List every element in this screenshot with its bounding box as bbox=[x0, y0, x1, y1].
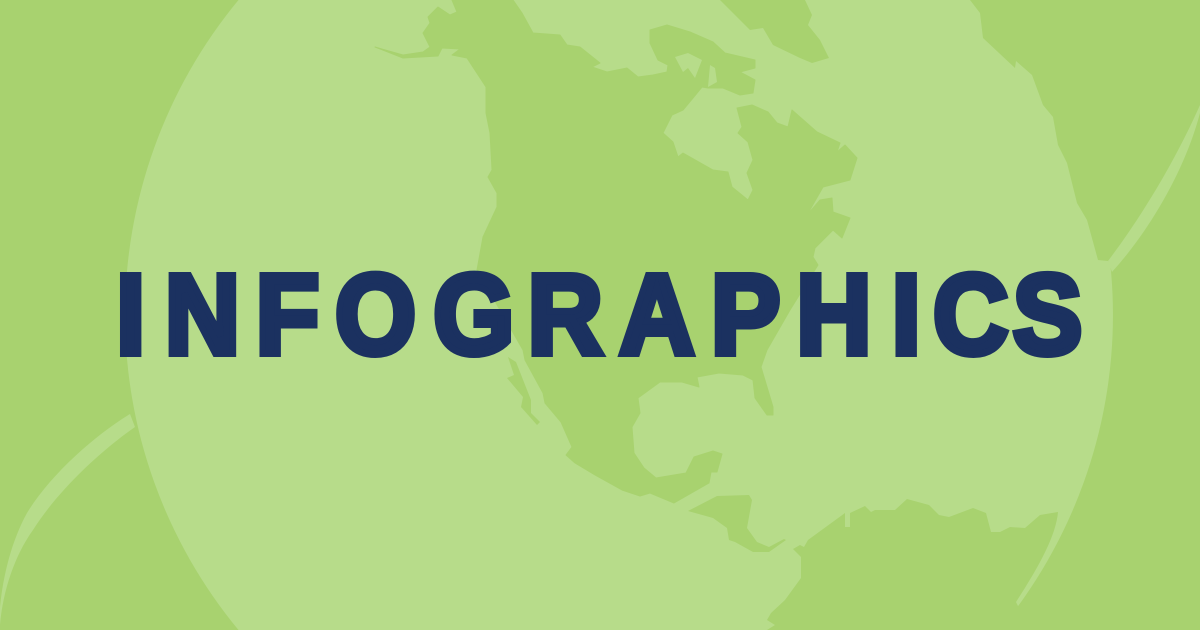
South America bbox=[767, 499, 1058, 630]
Baja California bbox=[507, 357, 540, 425]
North America bbox=[375, 0, 857, 503]
upper arctic island bbox=[720, 0, 829, 63]
Arctic channel bbox=[675, 53, 717, 87]
left orbit swoosh bbox=[0, 414, 135, 625]
top right dark land wedge bbox=[970, 0, 1200, 300]
title: INFOGRAPHICS bbox=[116, 253, 1082, 378]
right orbit swoosh bbox=[1108, 105, 1200, 272]
Central America bbox=[688, 495, 786, 552]
